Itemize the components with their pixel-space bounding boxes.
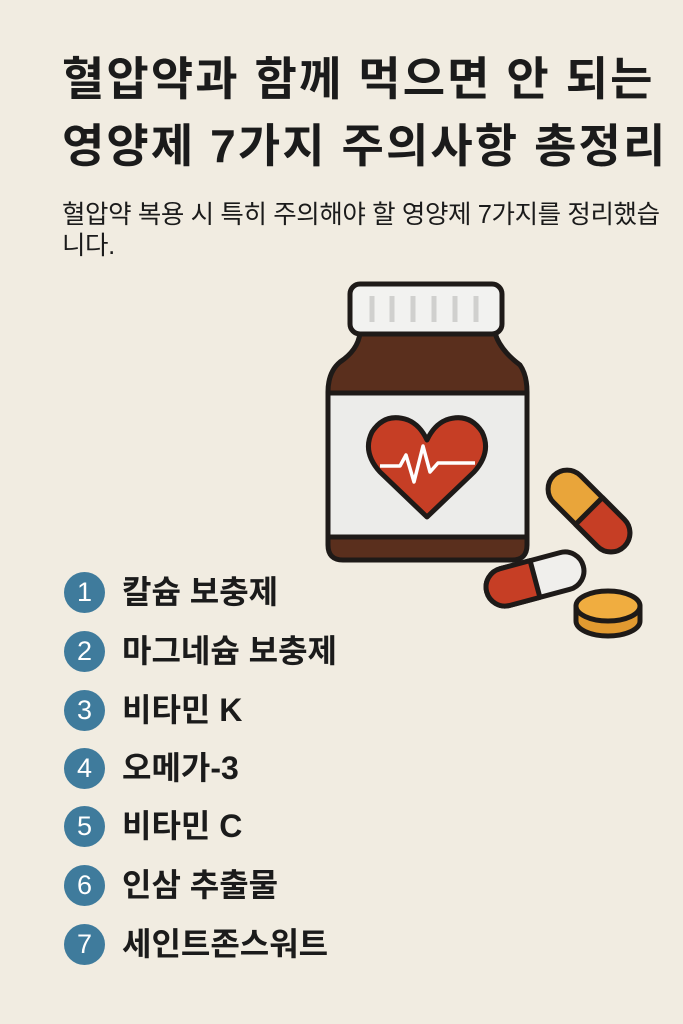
- item 3: [64, 690, 242, 731]
- icon: bottle: [328, 284, 527, 560]
- title: 영양제 7가지 주의사항 총정리: [62, 120, 667, 172]
- item 7: 7: [77, 929, 92, 959]
- item 3: 3: [77, 695, 92, 725]
- icon: tablet: [576, 591, 640, 636]
- item 2: 마그네슘 보충제: [122, 633, 337, 669]
- item 5: [64, 806, 242, 847]
- list of 7 supplements: [64, 572, 337, 965]
- item 6: 6: [77, 870, 92, 900]
- item 5: 비타민 C: [122, 808, 242, 844]
- icon: capsule orange: [540, 462, 638, 560]
- icon: heart: [368, 418, 486, 517]
- item 3: 비타민 K: [122, 692, 242, 728]
- item 7: [64, 924, 328, 965]
- icon: capsule red white: [482, 548, 588, 610]
- item 1: 칼슘 보충제: [122, 574, 278, 610]
- title: 혈압약과 함께 먹으면 안 되는: [62, 53, 655, 105]
- subtitle: 혈압약 복용 시 특히 주의해야 할 영양제 7가지를 정리했습니다.: [62, 201, 660, 260]
- item 1: 1: [77, 577, 92, 607]
- item 5: 5: [77, 811, 92, 841]
- item 4: 오메가-3: [122, 750, 239, 786]
- title: [62, 53, 667, 172]
- item 7: 세인트존스워트: [122, 926, 328, 962]
- item 4: [64, 748, 239, 789]
- item 2: [64, 631, 337, 672]
- item 6: 인삼 추출물: [122, 867, 278, 903]
- item 1: [64, 572, 278, 613]
- item 6: [64, 865, 278, 906]
- item 4: 4: [77, 753, 92, 783]
- item 2: 2: [77, 636, 92, 666]
